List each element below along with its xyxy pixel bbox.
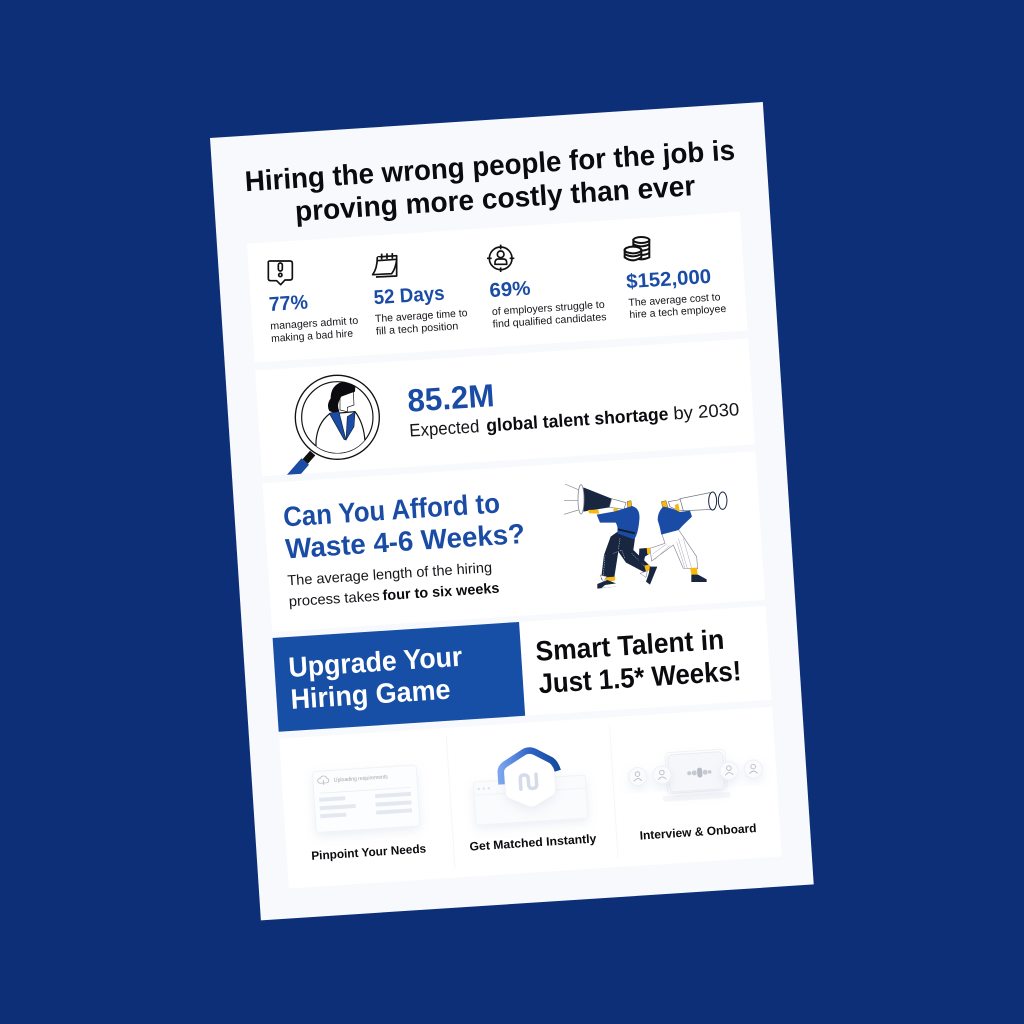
banner: upgrade your hiring game <box>273 622 525 732</box>
panel: three steps <box>279 707 782 888</box>
step 1: pinpoint your needs: Uploading requirements <box>334 774 388 784</box>
stat: 69%: of employers struggle to <box>492 299 605 318</box>
icon: magnifier with woman <box>287 375 379 481</box>
stat: 85.2M shortage: by 2030 <box>673 399 740 423</box>
stat: 52 Days: 52 Days <box>373 283 445 309</box>
step 2: get matched instantly <box>464 747 597 854</box>
headline: smart talent: Smart Talent in <box>535 624 725 667</box>
heading and supporting text: four to six weeks <box>382 581 500 604</box>
title: Hiring the wrong people for the job is <box>244 134 736 198</box>
stat: 52 Days: The average time to <box>375 307 468 325</box>
banner: upgrade your hiring game: Upgrade Your <box>288 641 463 683</box>
panel: key statistics <box>247 212 748 363</box>
headline: smart talent <box>535 623 742 699</box>
stat: 77%: 77% <box>268 292 309 316</box>
panel: can you afford <box>263 451 765 632</box>
step 2: get matched instantly: Get Matched Instantly <box>469 831 597 854</box>
heading and supporting text: process takes <box>288 588 380 610</box>
heading and supporting text: Waste 4-6 Weeks? <box>284 518 526 564</box>
heading and supporting text: The average length of the hiring <box>287 560 493 589</box>
step 3: interview and onboard: Interview & Onboard <box>639 821 757 843</box>
stat: 85.2M shortage <box>406 361 740 441</box>
stat: 77%: making a bad hire <box>271 328 354 345</box>
stat: 77% <box>268 288 360 345</box>
stat: 52 Days <box>373 281 469 338</box>
icon: alert speech bubble <box>268 261 292 285</box>
step 1: pinpoint your needs: Pinpoint Your Needs <box>311 841 427 863</box>
step 3: interview and onboard <box>627 747 767 843</box>
stat: 69% <box>489 273 607 331</box>
title <box>244 134 738 231</box>
icon: calendar <box>373 253 397 277</box>
stat: $152,000: hire a tech employee <box>629 303 727 321</box>
stat: 52 Days: fill a tech position <box>376 320 459 338</box>
stat: $152,000: The average cost to <box>628 291 721 309</box>
panel: upgrade banner <box>273 606 772 732</box>
icon: coin stacks <box>625 237 649 260</box>
panel: talent shortage <box>286 374 738 475</box>
title: proving more costly than ever <box>294 170 696 228</box>
stat: 85.2M shortage: global talent shortage <box>486 404 669 436</box>
stat: 85.2M shortage: Expected <box>409 416 480 441</box>
stat: 85.2M shortage: 85.2M <box>406 377 495 419</box>
poster sheet <box>210 102 814 920</box>
heading and supporting text: Can You Afford to <box>282 487 501 533</box>
banner: upgrade your hiring game: Hiring Game <box>290 674 451 715</box>
stat: $152,000: $152,000 <box>626 266 712 293</box>
stat: 77%: managers admit to <box>270 315 359 332</box>
step 1: pinpoint your needs <box>306 765 427 863</box>
illustration: megaphone and binoculars figures <box>564 484 727 589</box>
stat: $152,000 <box>626 265 727 321</box>
stat: 69%: find qualified candidates <box>492 311 607 331</box>
icon: candidate target <box>487 245 514 272</box>
headline: smart talent: Just 1.5* Weeks! <box>538 655 742 699</box>
stat: 69%: 69% <box>489 278 531 302</box>
heading and supporting text <box>282 486 529 610</box>
